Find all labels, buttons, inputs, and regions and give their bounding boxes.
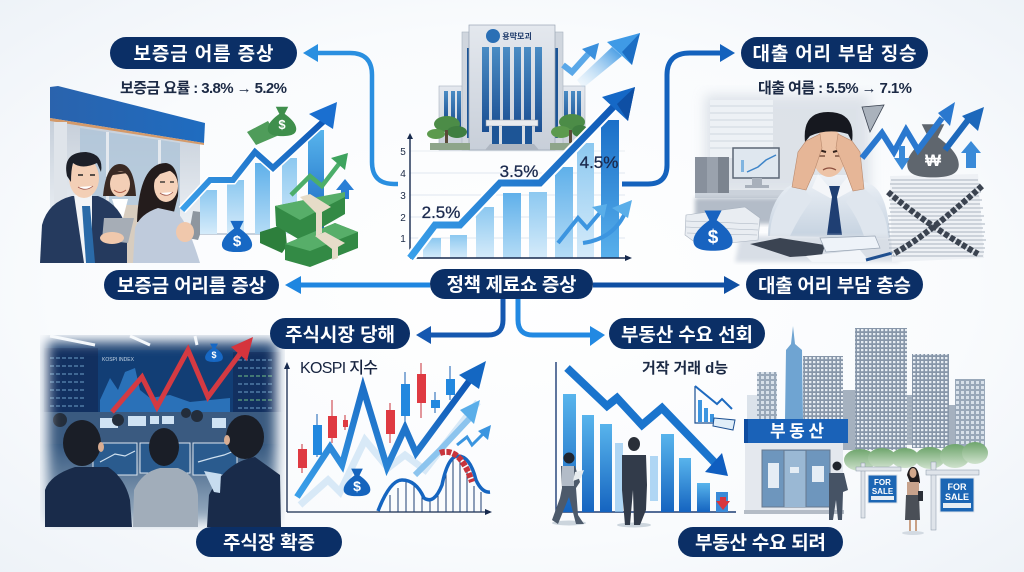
icon: cash stacks	[260, 192, 358, 267]
arrow: volatile rising trend	[862, 102, 984, 158]
pill: policy rate center: 정책 제료쇼 증상	[446, 274, 576, 296]
left arm and hand	[770, 134, 822, 236]
panel: central bank and policy rate chart	[400, 25, 640, 261]
icon: bank logo	[486, 29, 500, 43]
icon: blue money bag: $	[233, 233, 242, 250]
icon: roller coaster	[378, 452, 490, 512]
panel: real estate district	[744, 326, 988, 535]
pill: deposit rate heading	[110, 37, 297, 69]
icon: small rising arrow above chart	[563, 43, 599, 72]
bank sign: 용먁모괴	[502, 31, 532, 41]
arrow: to deposit rate rise	[303, 44, 398, 184]
arrow: right horizontal	[593, 276, 740, 294]
icon: blue money bag	[222, 221, 252, 252]
arrow: left horizontal	[285, 276, 430, 294]
icon: trees	[427, 114, 588, 150]
candlesticks	[298, 363, 455, 473]
pill: stock market result	[196, 527, 342, 557]
sign: for sale right: FOR	[948, 482, 967, 492]
screen label: KOSPI INDEX	[102, 357, 135, 363]
value label 3.5%: 3.5%	[500, 162, 538, 181]
icon: computer monitor	[733, 148, 779, 188]
value label 2.5%: 2.5%	[422, 203, 460, 222]
bar chart: policy rate	[400, 87, 635, 261]
illustration: trading floor	[40, 335, 285, 530]
y axis labels	[400, 147, 406, 245]
pill: real estate heading	[609, 318, 765, 349]
icon: binders	[695, 157, 729, 193]
icon: secondary light arrow	[415, 400, 480, 475]
arrow: rising trend	[182, 102, 337, 210]
icon: small arrows on chart	[558, 200, 632, 243]
right woman	[133, 163, 208, 263]
pill: real estate heading: 부동산 수요 선회	[621, 324, 753, 346]
bars	[563, 394, 728, 512]
label: loan rate sublabel: 대출 여름 : 5.5% → 7.1%	[758, 80, 912, 97]
y axis labels: 2	[400, 213, 406, 224]
illustration: stressed man	[768, 112, 890, 238]
icon: small zigzag arrow	[457, 425, 491, 445]
panel: loan burden	[685, 95, 986, 262]
illustration: man at office	[829, 462, 848, 520]
icon: small chart with cash	[695, 386, 735, 430]
icon: green money bag and cash: $	[278, 117, 286, 132]
pill: deposit rate result	[104, 270, 279, 300]
icon: bank of Korea building	[439, 25, 585, 150]
y axis labels: 4	[400, 169, 406, 180]
icon: small up arrow	[336, 179, 354, 199]
arrow: down to stock market	[416, 299, 503, 344]
icon: won money bag: ₩	[925, 151, 942, 170]
icon: down and up arrows	[894, 141, 981, 170]
bar chart: rising deposit rate	[182, 102, 337, 234]
illustration: woman with bag	[902, 467, 924, 535]
chart: falling real estate transactions	[552, 360, 736, 528]
label: transaction note: 거작 거래 d능	[642, 360, 728, 377]
chart: KOSPI index	[284, 359, 492, 515]
arrow: downward trend	[567, 368, 728, 476]
illustration: woman with tablet	[552, 452, 586, 526]
sign: for sale left: FOR	[874, 478, 891, 487]
pill: loan burden heading	[741, 37, 928, 69]
pill: stock market heading: 주식시장 당해	[285, 324, 395, 346]
illustration: man in suit	[617, 437, 651, 528]
pill: loan burden result: 대출 어리 부담 층승	[758, 275, 911, 297]
faded background trends	[300, 402, 478, 505]
middle woman	[98, 164, 140, 263]
man in suit	[40, 152, 134, 263]
arrow: down to real estate	[518, 299, 605, 346]
illustration: office background	[695, 95, 870, 224]
sign: for sale left: SALE	[872, 487, 894, 496]
label: KOSPI index: KOSPI 지수	[300, 359, 378, 377]
sign: real estate: 부동산	[770, 422, 824, 441]
icon: money bag: $	[353, 478, 361, 494]
value label 4.5%: 4.5%	[580, 153, 618, 172]
pill: deposit rate heading: 보증금 어름 증상	[134, 43, 274, 65]
pill: real estate result: 부동산 수요 되려	[695, 532, 826, 554]
panel: stock trading room	[40, 335, 285, 530]
illustration: trees and hedges	[844, 442, 988, 471]
icon: tornado	[862, 105, 884, 132]
icon: green money bag and cash	[247, 107, 296, 145]
connector arrows	[285, 44, 740, 346]
chart axes	[407, 133, 632, 261]
icon: blue money bag on papers	[685, 207, 760, 251]
y axis labels: 5	[400, 147, 406, 158]
icon: green arrow	[291, 153, 348, 195]
icon: small red down arrow	[716, 497, 730, 510]
pill: stock market result: 주식장 확증	[223, 532, 315, 554]
sign: for sale left	[856, 463, 901, 518]
y axis labels: 1	[400, 234, 406, 245]
pill: stock market heading	[270, 318, 410, 349]
arrow: policy rate rising	[410, 87, 635, 258]
icon: bank branch building	[50, 86, 205, 250]
sign: for sale right	[926, 462, 979, 530]
chart axes	[284, 362, 492, 515]
pill: real estate result	[678, 527, 843, 557]
label: deposit rate sublabel: 보증금 요률 : 3.8% → 5.2%	[120, 80, 287, 97]
icon: won money bag	[907, 124, 959, 177]
pill: deposit rate result: 보증금 어리름 증상	[117, 275, 266, 297]
illustration: three bank customers	[40, 152, 208, 263]
illustration: three traders from behind	[45, 415, 281, 527]
illustration: apartment towers	[747, 326, 985, 450]
icon: small money bag	[205, 344, 223, 362]
real estate office	[744, 419, 848, 514]
illustration: desk	[735, 236, 900, 262]
chart axes	[556, 362, 736, 512]
icon: small money bag: $	[211, 350, 217, 360]
icon: large rising arrow above chart	[577, 33, 640, 88]
pill: policy rate center	[430, 269, 593, 299]
arrow: KOSPI zigzag trend	[297, 361, 486, 497]
pill: loan burden result	[746, 269, 923, 300]
icon: money bag	[344, 469, 370, 496]
arrow: to loan burden rise	[622, 44, 735, 184]
arrow: red stock trend	[112, 337, 253, 412]
sign: for sale right: SALE	[945, 492, 969, 502]
y axis labels: 3	[400, 191, 406, 202]
pill: loan burden heading: 대출 어리 부담 징승	[752, 43, 916, 65]
right arm and hand	[836, 134, 888, 238]
icon: calculator and documents	[750, 236, 892, 262]
icon: stack of papers with chains	[888, 174, 986, 262]
panel: deposit rate rise	[40, 86, 358, 267]
icon: blue money bag on papers: $	[708, 227, 719, 248]
